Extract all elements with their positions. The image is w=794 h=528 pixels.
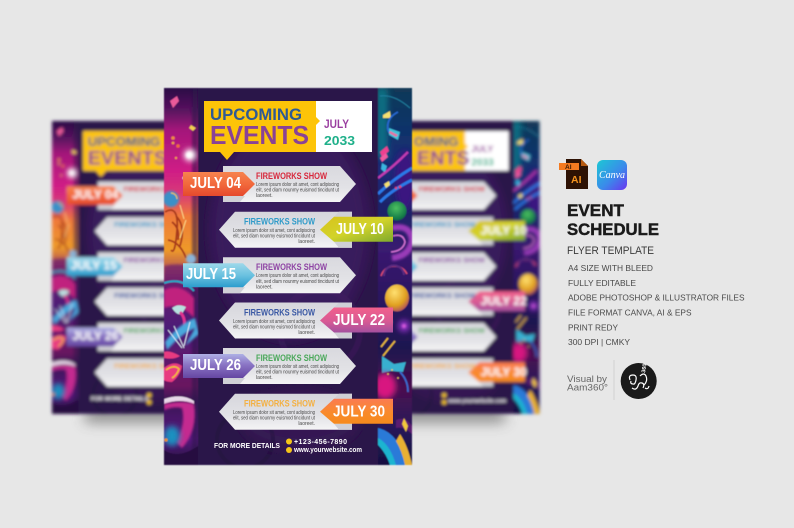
event row: July 10: FIREWORKS SHOW xyxy=(244,216,315,226)
back flyer: left xyxy=(51,121,247,416)
feature list: FULLY EDITABLE xyxy=(568,278,636,288)
back flyer: right: www.yourwebsite.com xyxy=(447,398,506,404)
event row: July 22: JULY 22 xyxy=(333,312,385,329)
heading: upcoming events: UPCOMING xyxy=(210,105,302,124)
credit: visual by xyxy=(567,374,608,393)
feature list: 300 DPI | CMKY xyxy=(568,337,630,347)
event row: July 04: laoreet. xyxy=(256,193,273,199)
event row: July 30: laoreet. xyxy=(298,421,315,427)
feature list: A4 SIZE WITH BLEED xyxy=(568,263,653,273)
event row: July 04: elit, sed diam nounmy euismod tincidunt ut xyxy=(256,188,340,194)
back flyer: left: FIREWORKS SHOW xyxy=(114,293,181,300)
icon: adobe illustrator xyxy=(559,159,588,189)
event row: July 15: FIREWORKS SHOW xyxy=(256,262,327,272)
event row: July 30: elit, sed diam nounmy euismod tincidunt ut xyxy=(233,416,316,422)
heading: upcoming events xyxy=(210,105,309,150)
back flyer: right: JULY 30 xyxy=(481,365,527,379)
back flyer: right: FIREWORKS SHOW xyxy=(409,222,476,229)
header banner xyxy=(204,101,372,160)
feature list: FILE FORMAT CANVA, AI & EPS xyxy=(568,308,692,318)
event row: July 10: Lorem ipsum dolor sit amet, cont adipiscing xyxy=(233,228,315,234)
event row: July 26: Lorem ipsum dolor sit amet, cont adipiscing xyxy=(256,364,339,370)
back flyer: right: ENTS xyxy=(417,148,470,170)
back flyer: left: FIREWORKS SHOW xyxy=(114,222,181,229)
title: event schedule: EVENT xyxy=(567,202,624,220)
back flyer: left: FIREWORKS SHOW xyxy=(123,258,190,265)
event row: July 04: JULY 04 xyxy=(190,175,241,192)
back flyer: left: EVENTS xyxy=(88,148,167,170)
back flyer: left: FIREWORKS SHOW xyxy=(123,187,190,194)
back flyer: right: OMING xyxy=(414,134,459,149)
event row: July 15: elit, sed diam nounmy euismod tincidunt ut xyxy=(256,279,340,285)
event row: July 30 xyxy=(219,394,393,430)
event row: July 15: Lorem ipsum dolor sit amet, cont adipiscing xyxy=(256,273,339,279)
subtitle: FLYER TEMPLATE xyxy=(567,245,654,257)
back flyer: left: UPCOMING xyxy=(88,134,160,149)
event row: July 22: Lorem ipsum dolor sit amet, cont adipiscing xyxy=(233,319,315,325)
date: july 2033: JULY xyxy=(324,119,349,131)
credit: visual by: Aam360° xyxy=(567,383,608,393)
event row: July 26: JULY 26 xyxy=(190,357,241,374)
flyer background artwork xyxy=(163,88,415,468)
event row: July 15: laoreet. xyxy=(256,284,273,290)
event row: July 15: JULY 15 xyxy=(186,266,236,283)
back flyer: right: FIREWORKS SHOW xyxy=(418,258,485,265)
event row: July 30: FIREWORKS SHOW xyxy=(244,398,315,408)
back flyer: right: FIREWORKS SHOW xyxy=(418,187,485,194)
event row: July 26: laoreet. xyxy=(256,375,273,381)
date: july 2033: 2033 xyxy=(324,133,355,148)
event row: July 30: JULY 30 xyxy=(333,403,385,420)
icon: canva xyxy=(597,160,627,190)
event row: July 04 xyxy=(183,166,356,202)
footer contact details: FOR MORE DETAILS xyxy=(214,441,280,450)
event row: July 22: FIREWORKS SHOW xyxy=(244,307,315,317)
feature list xyxy=(568,263,745,347)
back flyer: right: JULY 22 xyxy=(481,294,527,308)
event row: July 10: JULY 10 xyxy=(336,221,384,238)
credit: visual by: Visual by xyxy=(567,374,608,384)
event row: July 22: laoreet. xyxy=(298,330,315,336)
back flyer: right: FIREWORKS SHOW xyxy=(409,293,476,300)
back flyer: left: JULY 26 xyxy=(72,329,119,343)
event row: July 04: FIREWORKS SHOW xyxy=(256,171,327,181)
main flyer xyxy=(163,88,415,468)
event row: July 04: Lorem ipsum dolor sit amet, cont adipiscing xyxy=(256,182,339,188)
event row: July 10: laoreet. xyxy=(298,239,315,245)
event row: July 26 xyxy=(183,348,356,384)
footer contact details xyxy=(214,438,362,454)
title: event schedule: SCHEDULE xyxy=(567,221,659,239)
event row: July 22 xyxy=(219,302,393,338)
event row: July 30: Lorem ipsum dolor sit amet, cont adipiscing xyxy=(233,410,315,416)
event row: July 26: FIREWORKS SHOW xyxy=(256,353,327,363)
event row: July 10: elit, sed diam nounmy euismod tincidunt ut xyxy=(233,234,316,240)
event row: July 10 xyxy=(219,212,393,248)
event row: July 15 xyxy=(183,257,356,293)
footer contact details: +123-456-7890 xyxy=(294,439,347,446)
back flyer: left: FIREWORKS SHOW xyxy=(114,364,181,371)
logo: aam360 badge xyxy=(621,363,657,399)
back flyer: right: JULY 10 xyxy=(481,223,527,237)
back flyer: right: 2033 xyxy=(471,157,494,168)
feature list: ADOBE PHOTOSHOP & ILLUSTRATOR FILES xyxy=(568,293,745,303)
back flyer: left: JULY 15 xyxy=(71,258,117,272)
back flyer: right: JULY xyxy=(471,144,493,154)
back flyer: right xyxy=(346,121,542,416)
logo: aam360 badge: 360 xyxy=(641,363,649,373)
back flyer: left: FIREWORKS SHOW xyxy=(123,328,190,335)
title: event schedule xyxy=(567,202,659,239)
date: july 2033 xyxy=(324,119,355,148)
icon: web xyxy=(286,447,292,453)
back flyer shadow xyxy=(85,408,505,422)
back flyer: left: JULY 04 xyxy=(72,188,119,202)
back flyer: right: FIREWORKS SHOW xyxy=(409,364,476,371)
footer contact details: www.yourwebsite.com xyxy=(293,447,362,454)
event row: July 26: elit, sed diam nounmy euismod tincidunt ut xyxy=(256,370,340,376)
feature list: PRINT REDY xyxy=(568,322,618,332)
heading: upcoming events: EVENTS xyxy=(210,122,309,150)
icon: adobe illustrator: AI xyxy=(571,174,582,186)
icon: canva: Canva xyxy=(599,170,625,181)
event row: July 22: elit, sed diam nounmy euismod tincidunt ut xyxy=(233,324,316,330)
back flyer: right: FIREWORKS SHOW xyxy=(418,328,485,335)
icon: phone xyxy=(286,438,292,444)
icon: adobe illustrator: AI xyxy=(565,164,572,171)
back flyer: left: FOR MORE DETAILS xyxy=(91,397,148,403)
